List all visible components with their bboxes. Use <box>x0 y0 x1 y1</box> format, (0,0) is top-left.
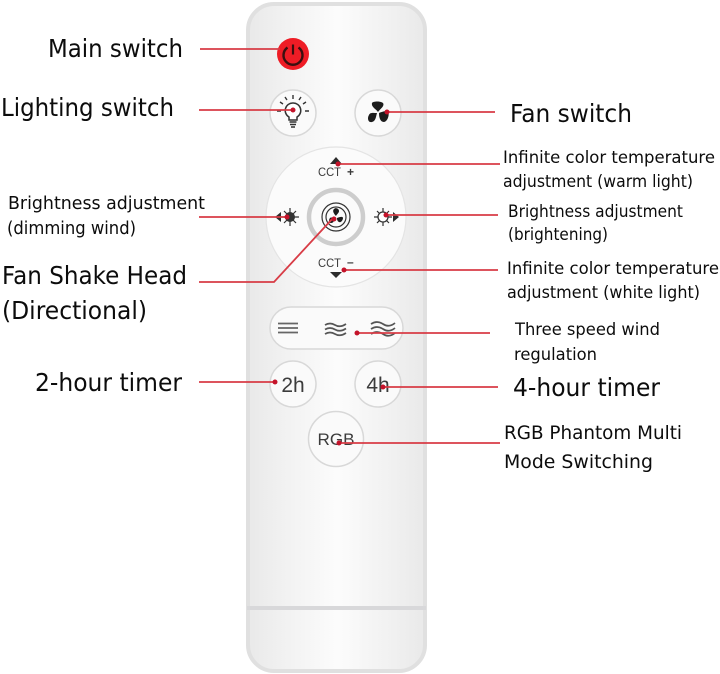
label: brightening: Brightness adjustment <box>508 202 683 222</box>
label: white light: Infinite color temperature <box>507 259 719 279</box>
wind speed pill <box>270 307 403 349</box>
label: dimming: (dimming wind) <box>7 218 136 239</box>
button: RGB <box>308 412 364 466</box>
label: warm light <box>503 148 715 192</box>
label: 4-hour timer: 4-hour timer <box>513 373 661 402</box>
label: warm light: adjustment (warm light) <box>503 172 693 192</box>
label: three speed wind: regulation <box>514 345 597 365</box>
label: RGB switching: Mode Switching <box>504 451 653 473</box>
label: fan shake head <box>2 261 187 325</box>
label: fan shake head: (Directional) <box>2 296 147 325</box>
leader lines <box>199 49 500 446</box>
remote control body <box>247 4 426 671</box>
button: 4h <box>355 361 401 407</box>
dial: CCT <box>318 167 341 179</box>
label: warm light: Infinite color temperature <box>503 148 715 168</box>
dial <box>266 147 406 287</box>
label: lighting switch: Lighting switch <box>1 93 174 122</box>
label: white light: adjustment (white light) <box>507 283 700 303</box>
label: brightening: (brightening) <box>508 225 608 245</box>
button: 4h: 4h <box>366 374 390 397</box>
label: RGB switching: RGB Phantom Multi <box>504 422 682 444</box>
label: RGB switching <box>504 422 682 473</box>
button: 2h: 2h <box>281 374 305 397</box>
label: main switch: Main switch <box>48 34 183 63</box>
dial: – <box>347 255 354 269</box>
button: power <box>277 38 309 70</box>
button: 2h <box>270 361 316 407</box>
label: three speed wind <box>514 320 660 365</box>
label: dimming <box>7 193 205 239</box>
dial: CCT <box>318 258 341 270</box>
label: white light <box>507 259 719 303</box>
label: brightening <box>508 202 683 245</box>
button: fan <box>355 90 401 136</box>
label: dimming: Brightness adjustment <box>8 193 205 214</box>
label: 2-hour timer: 2-hour timer <box>35 368 183 397</box>
label: fan shake head: Fan Shake Head <box>2 261 187 290</box>
button: RGB: RGB <box>318 430 354 449</box>
label: fan switch: Fan switch <box>510 99 632 128</box>
dial: + <box>347 165 354 179</box>
button: light <box>270 90 316 136</box>
label: three speed wind: Three speed wind <box>514 320 660 340</box>
